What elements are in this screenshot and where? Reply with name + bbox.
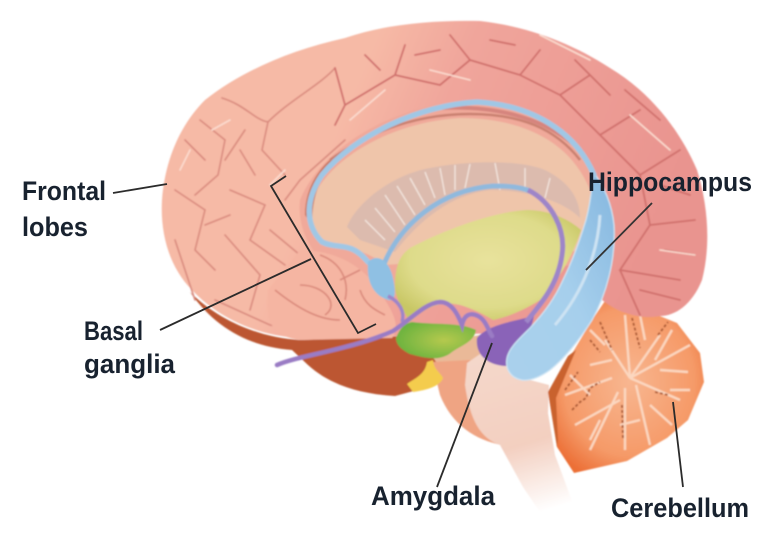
basal ganglia xyxy=(395,210,581,322)
label: amygdala: Amygdala xyxy=(371,481,496,511)
diencephalon tan backing xyxy=(425,300,545,375)
hippocampus blue xyxy=(507,172,614,380)
label: frontal lobes: lobes xyxy=(22,212,88,242)
cerebellum xyxy=(548,298,704,473)
frontal underside xyxy=(190,292,445,396)
label: basal ganglia: ganglia xyxy=(84,349,176,379)
corpus callosum xyxy=(309,118,590,265)
leader line: basal ganglia xyxy=(160,259,311,330)
leader line: frontal lobes xyxy=(113,184,167,193)
hypothalamus xyxy=(396,322,476,358)
leader line: amygdala xyxy=(437,343,492,487)
bracket xyxy=(271,176,376,333)
label: basal ganglia: Basal xyxy=(84,316,143,346)
brainstem midbrain lobe xyxy=(432,360,502,445)
septum grey fan xyxy=(347,162,580,252)
dark crescent xyxy=(305,155,336,225)
pituitary xyxy=(407,360,443,392)
cerebrum cortex xyxy=(162,21,707,338)
olfactory and fornix purple tract xyxy=(277,302,492,365)
fornix purple xyxy=(526,190,563,322)
amygdala xyxy=(477,316,534,366)
brainstem and spinal cord xyxy=(465,352,582,528)
label: cerebellum: Cerebellum xyxy=(611,493,749,523)
ventricle inner arc xyxy=(384,186,530,264)
leader line: hippocampus xyxy=(586,203,652,270)
ventricle outer arc xyxy=(309,102,594,262)
cortex folds xyxy=(175,68,345,335)
brain illustration xyxy=(162,21,707,528)
leader line: cerebellum xyxy=(673,402,683,487)
ventricle bulb xyxy=(368,258,395,300)
label: hippocampus: Hippocampus xyxy=(588,167,752,197)
medial frontal gyrus xyxy=(267,250,396,340)
cingulate ring xyxy=(300,100,602,300)
label: frontal lobes: Frontal xyxy=(22,176,106,206)
